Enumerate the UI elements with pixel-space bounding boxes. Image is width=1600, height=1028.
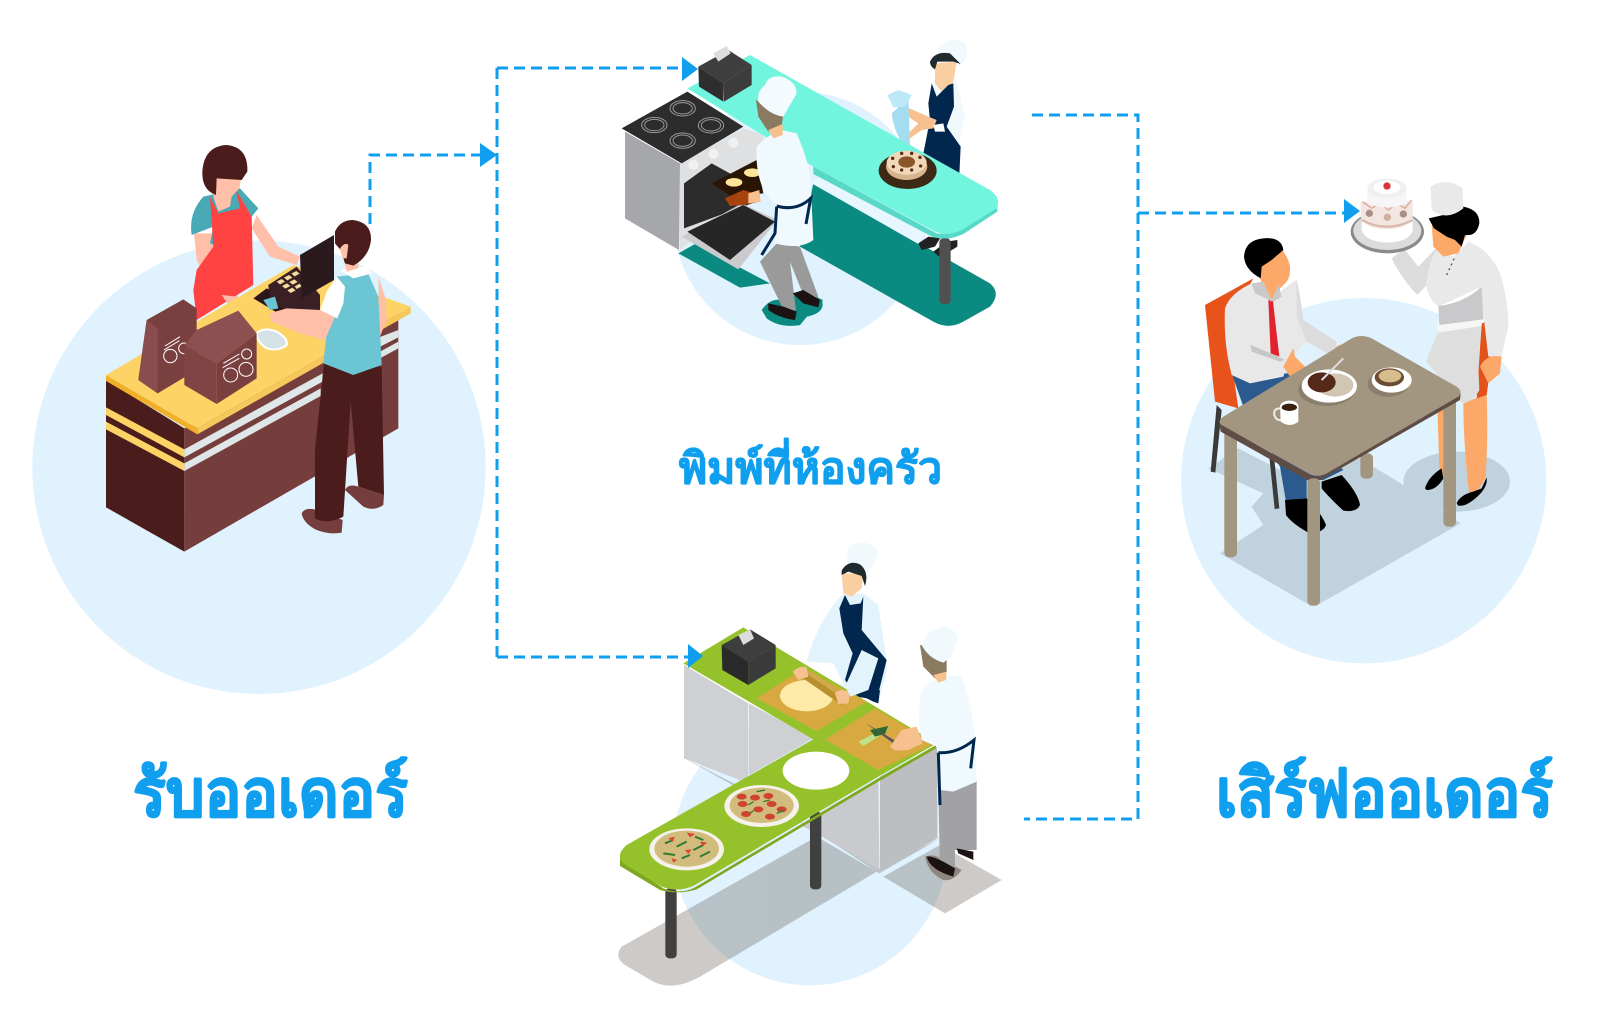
cake on turntable [879,151,937,189]
table [1219,336,1461,606]
background circle [673,711,947,985]
counter [106,265,411,552]
panel: take order scene [32,145,486,694]
teal counter [687,55,998,239]
connector: order to kitchen [370,68,690,657]
chef rolling dough body [807,542,887,703]
printer [698,46,752,102]
seated man [1225,238,1360,533]
cash register [253,235,334,320]
poles [665,812,821,958]
baker shoes and pole [918,237,957,304]
light band under counter [812,175,925,244]
printer [722,629,776,685]
vegetable pizza [649,828,724,870]
payment tray [257,330,287,349]
green countertop [620,627,937,892]
empty pizza base [783,752,849,790]
heading: take order: รับออเดอร์ [133,756,408,830]
panel: kitchen print scene [622,40,998,345]
background circle [1181,298,1546,663]
waitress [1392,182,1508,506]
paper bag front [184,311,257,404]
baker woman [887,40,967,175]
connector: kitchen to service [1024,115,1346,819]
arrowheads [480,57,1360,668]
background circle [32,241,486,694]
knife and cucumber [858,723,897,746]
floor shadows [618,837,1002,986]
heading: print in kitchen: พิมพ์ที่ห้องครัว [679,438,942,493]
baking tray [712,160,763,206]
background circle [673,92,927,345]
dough and rolling pin [780,650,880,711]
chair [1205,278,1279,509]
tray with cake [1351,178,1424,253]
cabinets [682,665,940,873]
floor shadows [1208,448,1510,605]
panel: serve order scene [1181,178,1546,663]
coffee cup [1274,401,1298,425]
chef at oven [748,76,823,326]
paper bag back [138,299,197,393]
floor shadow [678,183,996,326]
side plate [1368,367,1412,397]
cutting boards [757,668,935,770]
oven [622,92,777,269]
chef chopping [890,627,977,880]
heading: serve order: เสิร์ฟออเดอร์ [1216,756,1553,830]
steak plate [1298,358,1357,406]
pepperoni pizza [724,785,799,827]
panel: prep kitchen scene [618,542,1002,986]
customer man [269,220,387,533]
woman cashier [191,145,300,320]
